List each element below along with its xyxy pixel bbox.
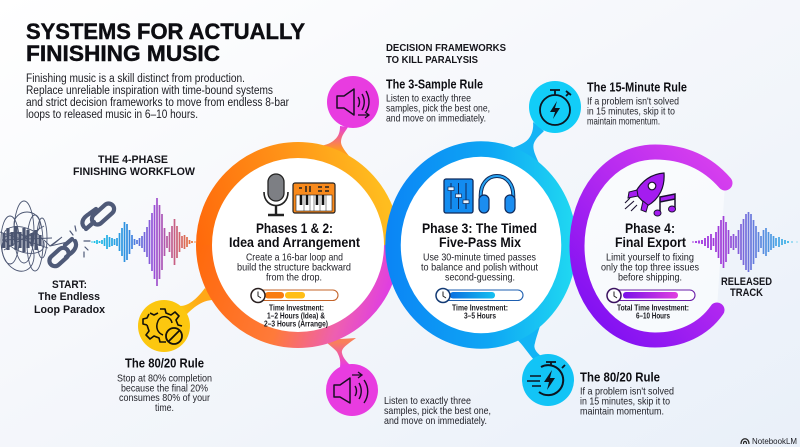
title: SYSTEMS FOR ACTUALLY [26, 19, 305, 44]
heading: decision frameworks: DECISION FRAMEWORKS [386, 42, 506, 54]
text: phase 3: Phase 3: The Timed [422, 220, 537, 236]
icon: mixer [444, 179, 473, 213]
text: phase 3: second-guessing. [445, 272, 515, 284]
label: start: Loop Paradox [34, 304, 106, 316]
icon: microphone [264, 174, 288, 215]
intro paragraph: and strict decision frameworks to move from endless 8-bar [26, 97, 289, 109]
icon: bottom speaker [326, 364, 378, 416]
heading: decision frameworks [386, 42, 506, 66]
text: phase 4: Limit yourself to fixing [606, 252, 694, 264]
icon: tangled loop [0, 201, 72, 276]
text: phase 4: Final Export [615, 234, 686, 250]
text: phase 4: Phase 4: [625, 220, 675, 236]
text: phases 1 and 2: build the structure backward [237, 262, 351, 274]
label: start: START: [52, 279, 87, 291]
heading: decision frameworks: TO KILL PARALYSIS [386, 54, 478, 66]
text: phase 3 [421, 220, 538, 284]
text: time investment 1: 1–2 Hours (Idea) & [267, 312, 325, 320]
text: 80/20 rule right: maintain momentum. [580, 406, 664, 418]
icon: broken chain [47, 201, 116, 268]
text: phase 4 [601, 220, 699, 284]
connector: yellow [180, 288, 214, 314]
heading: workflow: FINISHING WORKFLOW [73, 166, 196, 178]
text: 80/20 rule left: consumes 80% of your [119, 392, 210, 404]
connector: bottom pink [324, 338, 356, 367]
title [26, 19, 305, 66]
text: time investment 4 [617, 304, 689, 320]
icon: rocket [625, 173, 664, 212]
waveform: left [92, 198, 195, 286]
text: time investment 3: Time Investment: [452, 304, 508, 312]
waveform: right [693, 212, 797, 272]
text: bottom speaker rule: Listen to exactly three [384, 395, 471, 407]
text: time investment 1: 2–3 Hours (Arrange) [264, 320, 328, 328]
text: 80/20 rule left: time. [155, 402, 174, 414]
progress bar: phase 3 [436, 288, 523, 302]
text: 80/20 rule right: in 15 minutes, skip it to [580, 396, 670, 408]
text: time investment 4: 6–10 Hours [636, 312, 671, 320]
text: time investment 3 [452, 304, 508, 320]
icon: 80/20 gear [138, 300, 190, 352]
text: phases 1 and 2: Phases 1 & 2: [256, 220, 333, 236]
text: 3-sample rule: and move on immediately. [386, 112, 486, 124]
icon: bottom stopwatch [522, 354, 574, 406]
text: 15-minute rule: The 15-Minute Rule [587, 80, 687, 94]
text: 80/20 rule right [580, 370, 674, 418]
text: 3-sample rule: The 3-Sample Rule [386, 76, 483, 92]
panel: phase 4 ring [576, 152, 725, 340]
text: 15-minute rule: If a problem isn't solved [587, 96, 679, 108]
text: bottom speaker rule [384, 395, 491, 427]
text: time investment 3: 3–5 Hours [464, 312, 497, 320]
panel: phases 1 and 2 ring [204, 150, 392, 340]
intro paragraph [26, 73, 289, 121]
label: released track [721, 276, 772, 299]
intro paragraph: Replace unreliable inspiration with time-bound systems [26, 85, 273, 97]
title: FINISHING MUSIC [26, 41, 220, 66]
text: bottom speaker rule: samples, pick the best one, [384, 405, 491, 417]
icon: 15-minute stopwatch [529, 81, 581, 133]
text: 3-sample rule [386, 76, 490, 124]
logo: NotebookLM: NotebookLM [752, 436, 797, 446]
text: 15-minute rule: in 15 minutes, skip it to [587, 106, 675, 118]
icon: keyboard [293, 183, 335, 213]
icon: 3-sample speaker [327, 76, 379, 128]
text: 3-sample rule: Listen to exactly three [386, 92, 471, 104]
connector: top pink [316, 126, 358, 168]
connector: bottom cyan [512, 326, 541, 361]
text: 3-sample rule: samples, pick the best one, [386, 102, 490, 114]
label: start [34, 279, 106, 316]
label: released track: RELEASED [721, 276, 772, 288]
text: phase 3: Use 30-minute timed passes [423, 252, 536, 264]
text: phases 1 and 2 [229, 220, 360, 284]
text: phases 1 and 2: Idea and Arrangement [229, 234, 360, 250]
icon: headphones [479, 176, 515, 213]
label: start: The Endless [38, 291, 100, 303]
panel: phase 3 ring [393, 149, 569, 341]
progress bar: phase 4 [607, 288, 695, 302]
connector: top cyan [512, 122, 544, 165]
text: phases 1 and 2: Create a 16-bar loop and [246, 252, 343, 264]
text: phases 1 and 2: from the drop. [266, 272, 322, 284]
text: 80/20 rule right: The 80/20 Rule [580, 370, 660, 384]
text: 80/20 rule left: The 80/20 Rule [125, 356, 204, 370]
text: phase 4: only the top three issues [601, 262, 699, 274]
text: time investment 1: Time Investment: [269, 304, 324, 312]
text: time investment 1 [264, 304, 328, 328]
text: 15-minute rule [587, 80, 687, 128]
text: time investment 4: Total Time Investment: [617, 304, 689, 312]
text: 80/20 rule left: because the final 20% [121, 382, 208, 394]
progress bar: phases 1 and 2 [251, 288, 338, 302]
text: 80/20 rule left: Stop at 80% completion [117, 372, 212, 384]
text: phase 3: Five-Pass Mix [439, 234, 521, 250]
heading: workflow [73, 154, 196, 178]
text: 80/20 rule left [117, 356, 212, 414]
text: 15-minute rule: maintain momentum. [587, 116, 660, 128]
text: phase 4: before shipping. [618, 272, 682, 284]
heading: workflow: THE 4-PHASE [98, 154, 168, 166]
intro paragraph: loops to released music in 6–10 hours. [26, 109, 198, 121]
label: released track: TRACK [730, 287, 763, 299]
intro paragraph: Finishing music is a skill distinct from production. [26, 73, 245, 85]
text: phase 3: to balance and polish without [421, 262, 538, 274]
text: bottom speaker rule: and move on immediately. [384, 415, 487, 427]
icon: music note [654, 194, 676, 216]
text: 80/20 rule right: If a problem isn't solved [580, 386, 674, 398]
